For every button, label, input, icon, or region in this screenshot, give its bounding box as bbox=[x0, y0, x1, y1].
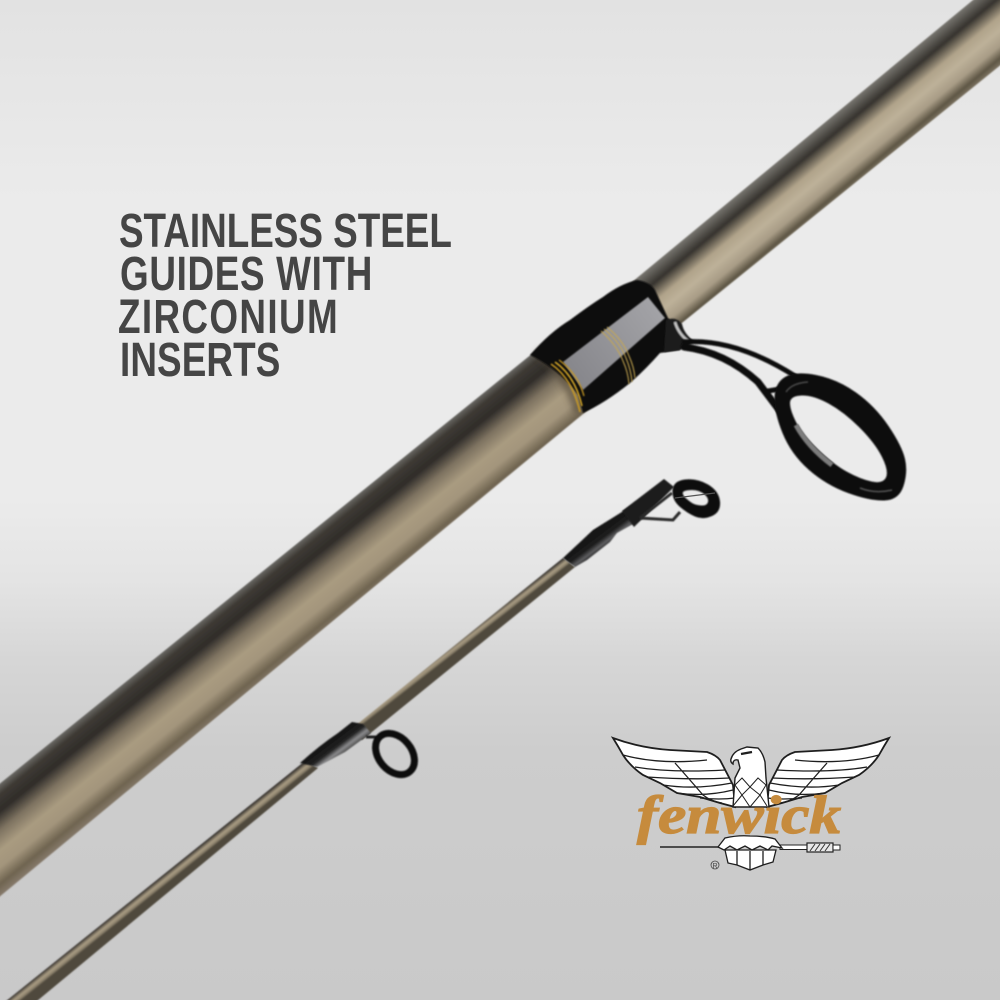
guide frame legs bbox=[684, 342, 795, 414]
heading: stainless steel guides with zirconium inserts: GUIDES WITH bbox=[120, 247, 372, 301]
thin rod section with tip bbox=[0, 479, 720, 1000]
registered mark bbox=[711, 861, 719, 870]
small guide bbox=[366, 726, 422, 782]
tip tube bbox=[622, 479, 674, 527]
right wing bbox=[767, 738, 889, 807]
rod blank: lower section bbox=[0, 331, 610, 946]
lower wrap bbox=[300, 722, 371, 767]
left wing bbox=[613, 738, 735, 807]
logo: fenwick eagle bbox=[613, 738, 889, 870]
tip wire bbox=[675, 493, 715, 498]
heading: stainless steel guides with zirconium inserts bbox=[118, 204, 452, 387]
guide foot bbox=[664, 319, 694, 352]
heading: stainless steel guides with zirconium inserts: STAINLESS STEEL bbox=[119, 204, 452, 258]
thread wrap bbox=[530, 280, 680, 413]
blank: lower shaft bbox=[0, 761, 318, 1000]
eagle wings bbox=[613, 738, 889, 807]
upper wrap bbox=[563, 505, 640, 567]
tip frame bbox=[640, 493, 680, 520]
tip ring bbox=[672, 479, 720, 518]
heading: stainless steel guides with zirconium inserts: ZIRCONIUM bbox=[118, 290, 338, 344]
eagle head and body bbox=[731, 747, 769, 807]
fenwick wordmark: fenwick bbox=[637, 785, 841, 845]
talons and tail bbox=[718, 836, 782, 870]
shadow beside wrap bbox=[538, 352, 579, 412]
blank: upper shaft bbox=[350, 558, 575, 740]
heading: stainless steel guides with zirconium inserts: INSERTS bbox=[120, 333, 280, 387]
rod blank: upper section bbox=[626, 0, 1000, 345]
gray wrap band bbox=[563, 297, 665, 390]
registered mark: R bbox=[712, 863, 718, 870]
guide ring bbox=[774, 373, 906, 501]
fishing rod mark bbox=[660, 843, 840, 852]
gold trim bands bbox=[551, 327, 635, 412]
ring insert highlight bbox=[786, 382, 892, 492]
